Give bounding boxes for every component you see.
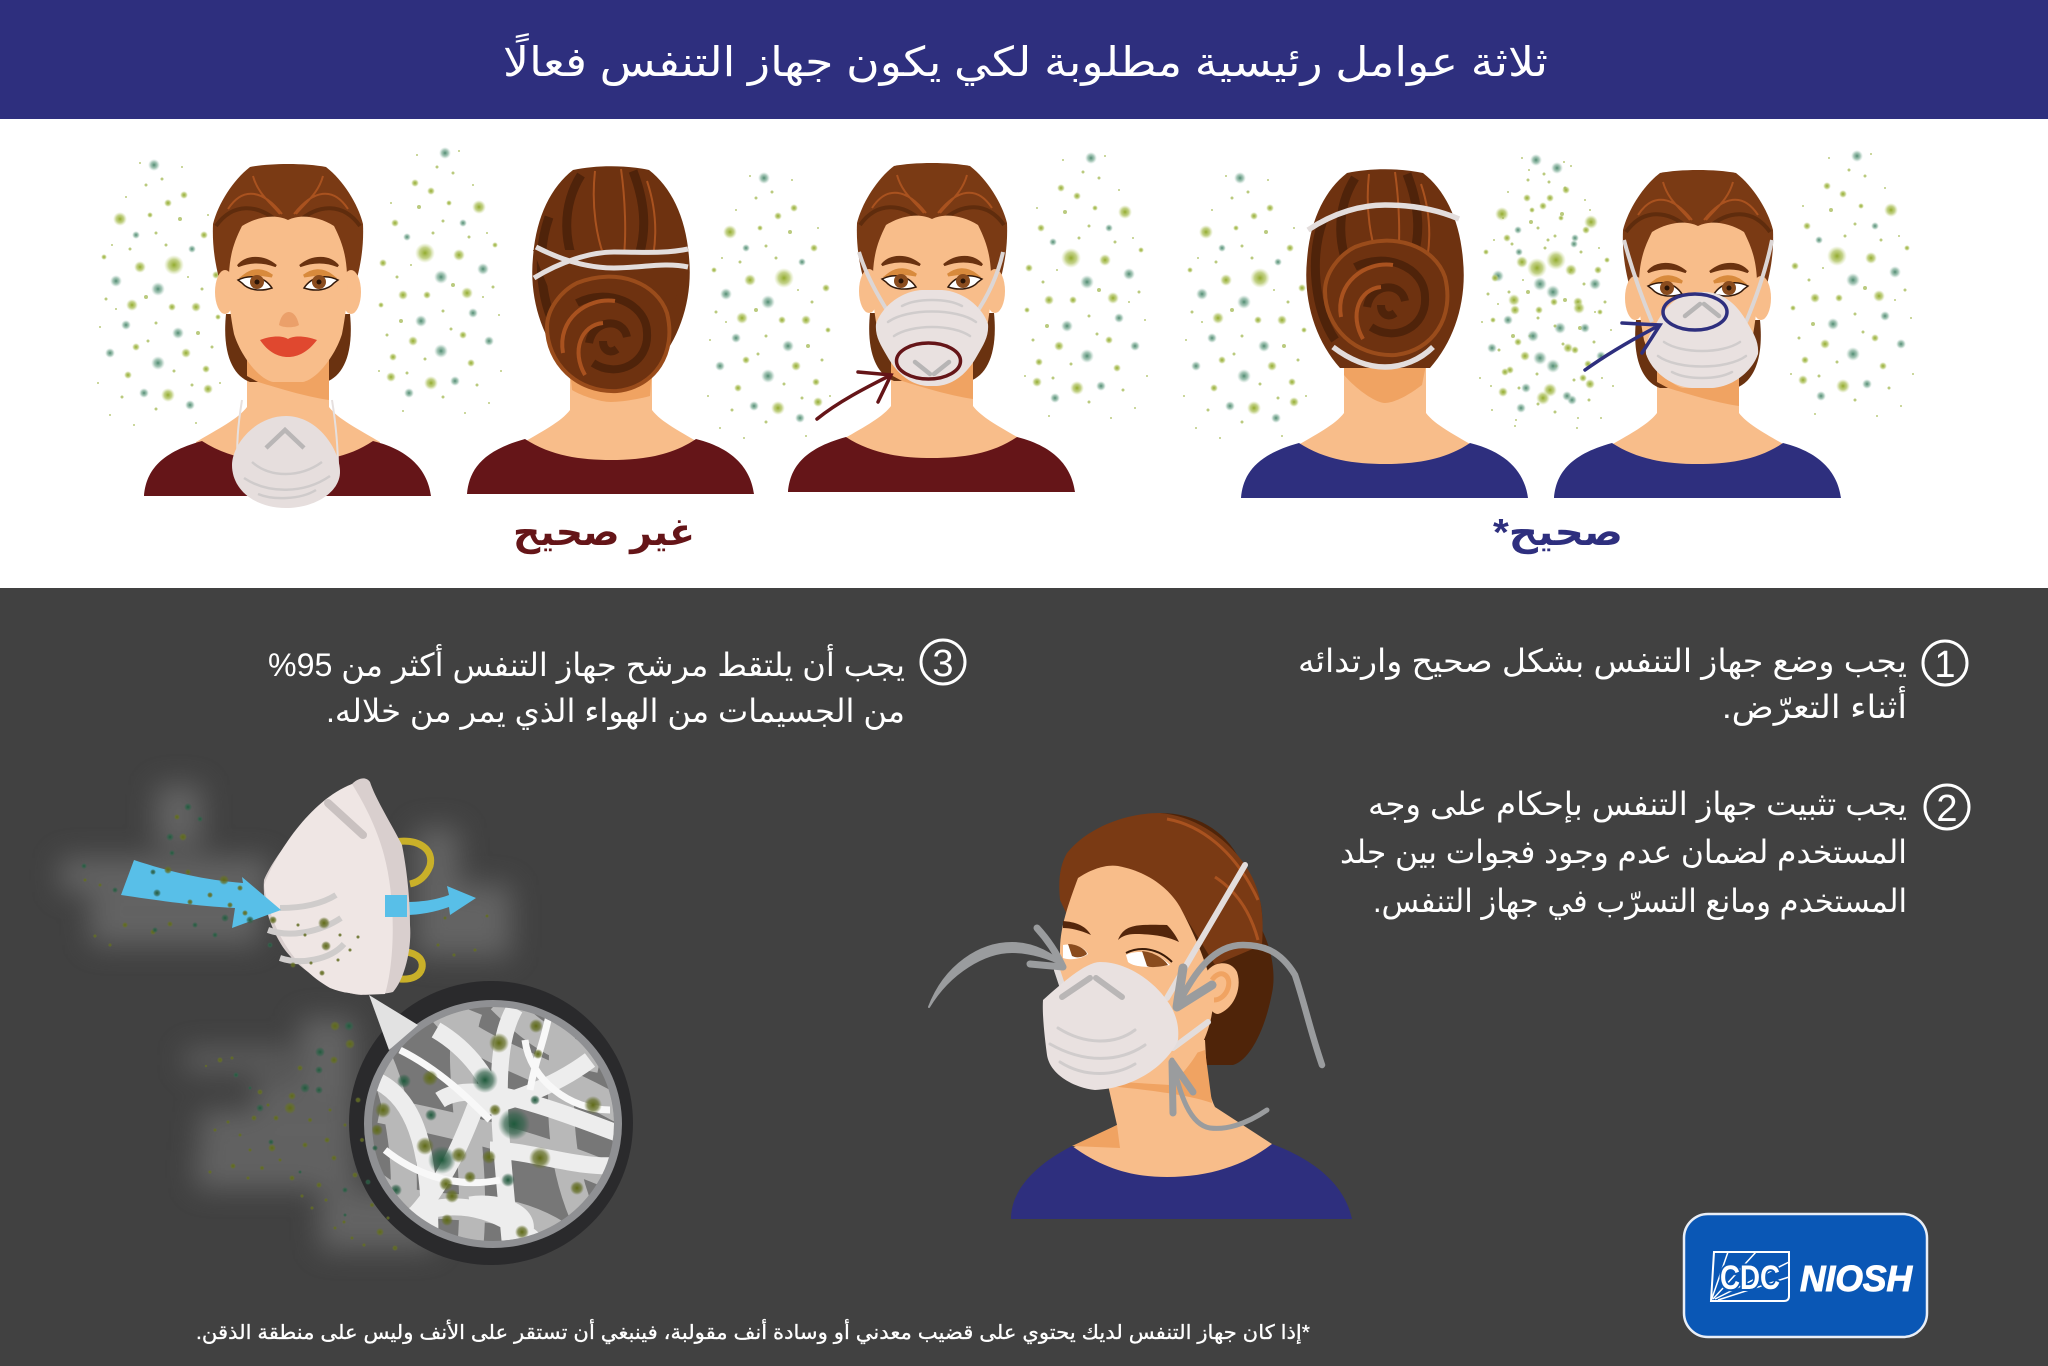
arrow <box>817 372 891 419</box>
pleats <box>268 895 344 961</box>
arrow <box>1585 323 1660 370</box>
title: ثلاثة عوامل رئيسية مطلوبة لكي يكون جهاز التنفس فعالًا <box>503 33 1548 87</box>
mask on neck <box>232 400 340 508</box>
number badge 3: 3 <box>932 643 954 685</box>
illustration: filter magnifier lens <box>349 981 633 1265</box>
flipped mask <box>876 290 988 386</box>
callout circle <box>1663 294 1727 330</box>
shirt <box>1011 1144 1352 1219</box>
illustration: woman with fitted respirator <box>929 813 1352 1219</box>
logo: CDC <box>1711 1252 1789 1301</box>
logo: CDC: CDC <box>1720 1259 1780 1297</box>
text block: factor 2: المستخدم ومانع التسرّب في جهاز التنفس. <box>1373 883 1907 920</box>
illustration: air flow haze <box>60 785 511 1250</box>
eyes and brows <box>1063 921 1179 967</box>
straps <box>1308 205 1459 230</box>
arrow: air in <box>121 860 281 928</box>
straps <box>394 841 431 979</box>
text block: factor 1: يجب وضع جهاز التنفس بشكل صحيح وارتدائه <box>1298 643 1907 680</box>
callout wedge <box>369 995 418 1050</box>
text block: factor 3: من الجسيمات من الهواء الذي يمر من خلاله. <box>326 693 905 730</box>
figure: correct (back) <box>1241 169 1528 498</box>
number badge 2 <box>1925 785 1969 830</box>
nose pad <box>328 803 363 835</box>
text block: factor 3: يجب أن يلتقط مرشح جهاز التنفس أكثر من 95% <box>268 644 905 684</box>
face <box>1060 866 1213 1085</box>
label: correct: صحيح* <box>1493 512 1623 554</box>
mask body <box>264 778 410 995</box>
icon: nose <box>279 312 299 327</box>
number badge 1 <box>1923 641 1967 686</box>
number badge 1: 1 <box>1934 644 1956 686</box>
illustration: particles lower <box>204 1021 398 1251</box>
text block: factor 2: يجب تثبيت جهاز التنفس بإحكام على وجه <box>1368 786 1907 823</box>
number badge 2: 2 <box>1936 788 1958 830</box>
figure: incorrect, straps crossed (back) <box>467 166 754 494</box>
straps <box>534 247 688 278</box>
footnote: *إذا كان جهاز التنفس لديك يحتوي على قضيب معدني أو وسادة أنف مقولبة، فينبغي أن تستقر على الأنف وليس على منطقة الذقن. <box>196 1319 1310 1345</box>
text block: factor 2 <box>1340 785 1969 920</box>
hair top <box>1059 813 1263 965</box>
hair back and bun <box>1150 813 1274 1065</box>
logo: NIOSH: NIOSH <box>1800 1258 1913 1299</box>
particles on mask <box>83 814 489 976</box>
band <box>385 895 407 917</box>
callout circle <box>896 343 960 379</box>
number badge 3 <box>921 640 965 685</box>
logo: CDC NIOSH <box>1684 1214 1927 1337</box>
figure: correct (front) <box>1554 170 1841 498</box>
title banner <box>0 0 2048 119</box>
text block: factor 2: المستخدم لضمان عدم وجود فجوات بين جلد <box>1340 834 1907 871</box>
label: incorrect: غير صحيح <box>513 512 695 554</box>
text block: factor 1: أثناء التعرّض. <box>1722 686 1907 726</box>
straps <box>859 252 1003 315</box>
background panel <box>0 588 2048 1366</box>
mask <box>1646 292 1758 388</box>
ear <box>1205 963 1239 1014</box>
figure: incorrect, mask below nose <box>788 163 1075 492</box>
arrows: seal check <box>929 928 1322 1128</box>
particle clouds <box>97 147 1914 439</box>
illustration: filtering respirator <box>81 778 489 995</box>
straps <box>1624 240 1772 322</box>
mask <box>1043 962 1178 1090</box>
text block: factor 1 <box>1298 641 1967 726</box>
white panel <box>0 119 2048 588</box>
neck <box>1068 1040 1280 1190</box>
icon: lips <box>260 336 317 357</box>
arrow: air out <box>405 886 476 915</box>
straps <box>1057 865 1245 1048</box>
figure: incorrect, mask on neck <box>144 164 431 508</box>
text block: factor 3 <box>268 640 965 730</box>
